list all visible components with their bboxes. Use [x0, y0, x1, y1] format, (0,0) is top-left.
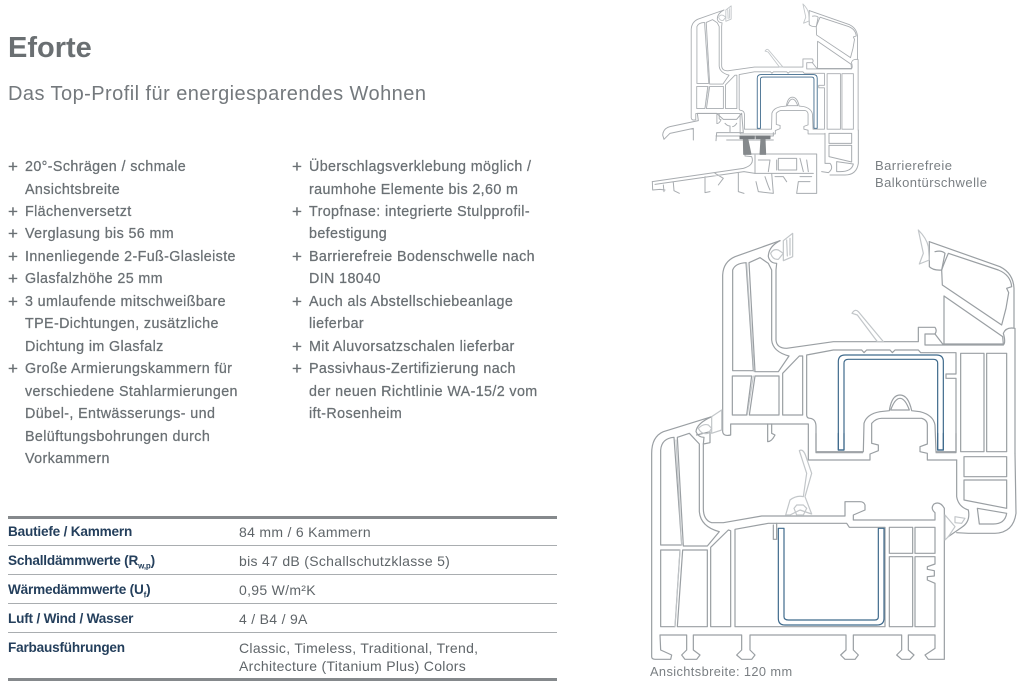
feature list: right column: Überschlagsverklebung möglich /	[309, 159, 531, 175]
caption: face width: Ansichtsbreite: 120 mm	[650, 664, 793, 679]
specification table: 84 mm / 6 Kammern	[239, 524, 371, 540]
feature list: left column: verschiedene Stahlarmierungen	[25, 384, 238, 400]
diagram: barrier-free balcony door threshold cross-section	[652, 4, 859, 194]
feature list: right column: +	[292, 292, 302, 311]
feature list: left column: +	[8, 247, 18, 266]
feature list: left column: Ansichtsbreite	[25, 182, 120, 198]
feature list: right column: der neuen Richtlinie WA-15/2 vom	[309, 384, 538, 400]
feature list: right column: +	[292, 157, 302, 176]
specification table: Wärmedämmwerte (Uf)	[8, 582, 150, 600]
feature list: left column: +	[8, 292, 18, 311]
threshold base	[652, 113, 858, 193]
feature list: left column: Belüftungsbohrungen durch	[25, 429, 210, 445]
subtitle: Das Top-Profil für energiesparendes Wohnen	[8, 83, 426, 105]
feature list: left column: Innenliegende 2-Fuß-Glasleiste	[25, 249, 236, 265]
feature list: left column: Glasfalzhöhe 25 mm	[25, 271, 163, 287]
specification table: Bautiefe / Kammern	[8, 524, 132, 539]
feature list: left column: +	[8, 202, 18, 221]
feature list: left column	[8, 157, 238, 467]
feature list: left column: Große Armierungskammern für	[25, 361, 232, 377]
diagram: large window profile cross-section	[651, 229, 1017, 660]
feature list: left column: +	[8, 359, 18, 378]
feature list: right column: ift-Rosenheim	[309, 406, 402, 422]
feature list: left column: +	[8, 269, 18, 288]
feature list: right column: befestigung	[309, 226, 387, 242]
feature list: right column: DIN 18040	[309, 271, 381, 287]
feature list: left column: TPE-Dichtungen, zusätzliche	[25, 316, 219, 332]
feature list: left column: Dübel-, Entwässerungs- und	[25, 406, 215, 422]
specification table: Classic, Timeless, Traditional, Trend,	[239, 640, 478, 656]
feature list: right column: Auch als Abstellschiebeanlage	[309, 294, 513, 310]
specification table: Farbausführungen	[8, 640, 125, 655]
specification table: bis 47 dB (Schallschutzklasse 5)	[239, 553, 450, 569]
feature list: left column: Flächenversetzt	[25, 204, 132, 220]
lower frame and second sash gasket	[652, 410, 1016, 659]
feature list: right column: Barrierefreie Bodenschwelle nach	[309, 249, 535, 265]
caption: threshold: Barrierefreie	[875, 158, 952, 173]
feature list: right column: +	[292, 247, 302, 266]
feature list: left column: Verglasung bis 56 mm	[25, 226, 174, 242]
feature list: right column	[292, 157, 538, 422]
feature list: right column: Passivhaus-Zertifizierung nach	[309, 361, 516, 377]
feature list: left column: Dichtung im Glasfalz	[25, 339, 164, 355]
feature list: right column: Tropfnase: integrierte Stulpprofil-	[309, 204, 530, 220]
feature list: right column: Mit Aluvorsatzschalen lieferbar	[309, 339, 515, 355]
specification table: Architecture (Titanium Plus) Colors	[239, 658, 466, 674]
specification table: Schalldämmwerte (Rw,p)	[8, 553, 155, 571]
feature list: right column: lieferbar	[309, 316, 364, 332]
title: Eforte	[8, 32, 92, 64]
feature list: right column: +	[292, 359, 302, 378]
feature list: left column: 3 umlaufende mitschweißbare	[25, 294, 226, 310]
feature list: right column: raumhohe Elemente bis 2,60 m	[309, 182, 518, 198]
feature list: left column: 20°-Schrägen / schmale	[25, 159, 186, 175]
feature list: left column: +	[8, 224, 18, 243]
specification table	[8, 516, 557, 681]
caption: threshold	[875, 158, 987, 190]
feature list: right column: +	[292, 337, 302, 356]
feature list: left column: +	[8, 157, 18, 176]
specification table: 4 / B4 / 9A	[239, 611, 308, 627]
specification table: Luft / Wind / Wasser	[8, 611, 133, 626]
feature list: left column: Vorkammern	[25, 451, 110, 467]
specification table: 0,95 W/m²K	[239, 582, 316, 598]
feature list: right column: +	[292, 202, 302, 221]
caption: threshold: Balkontürschwelle	[875, 175, 987, 190]
